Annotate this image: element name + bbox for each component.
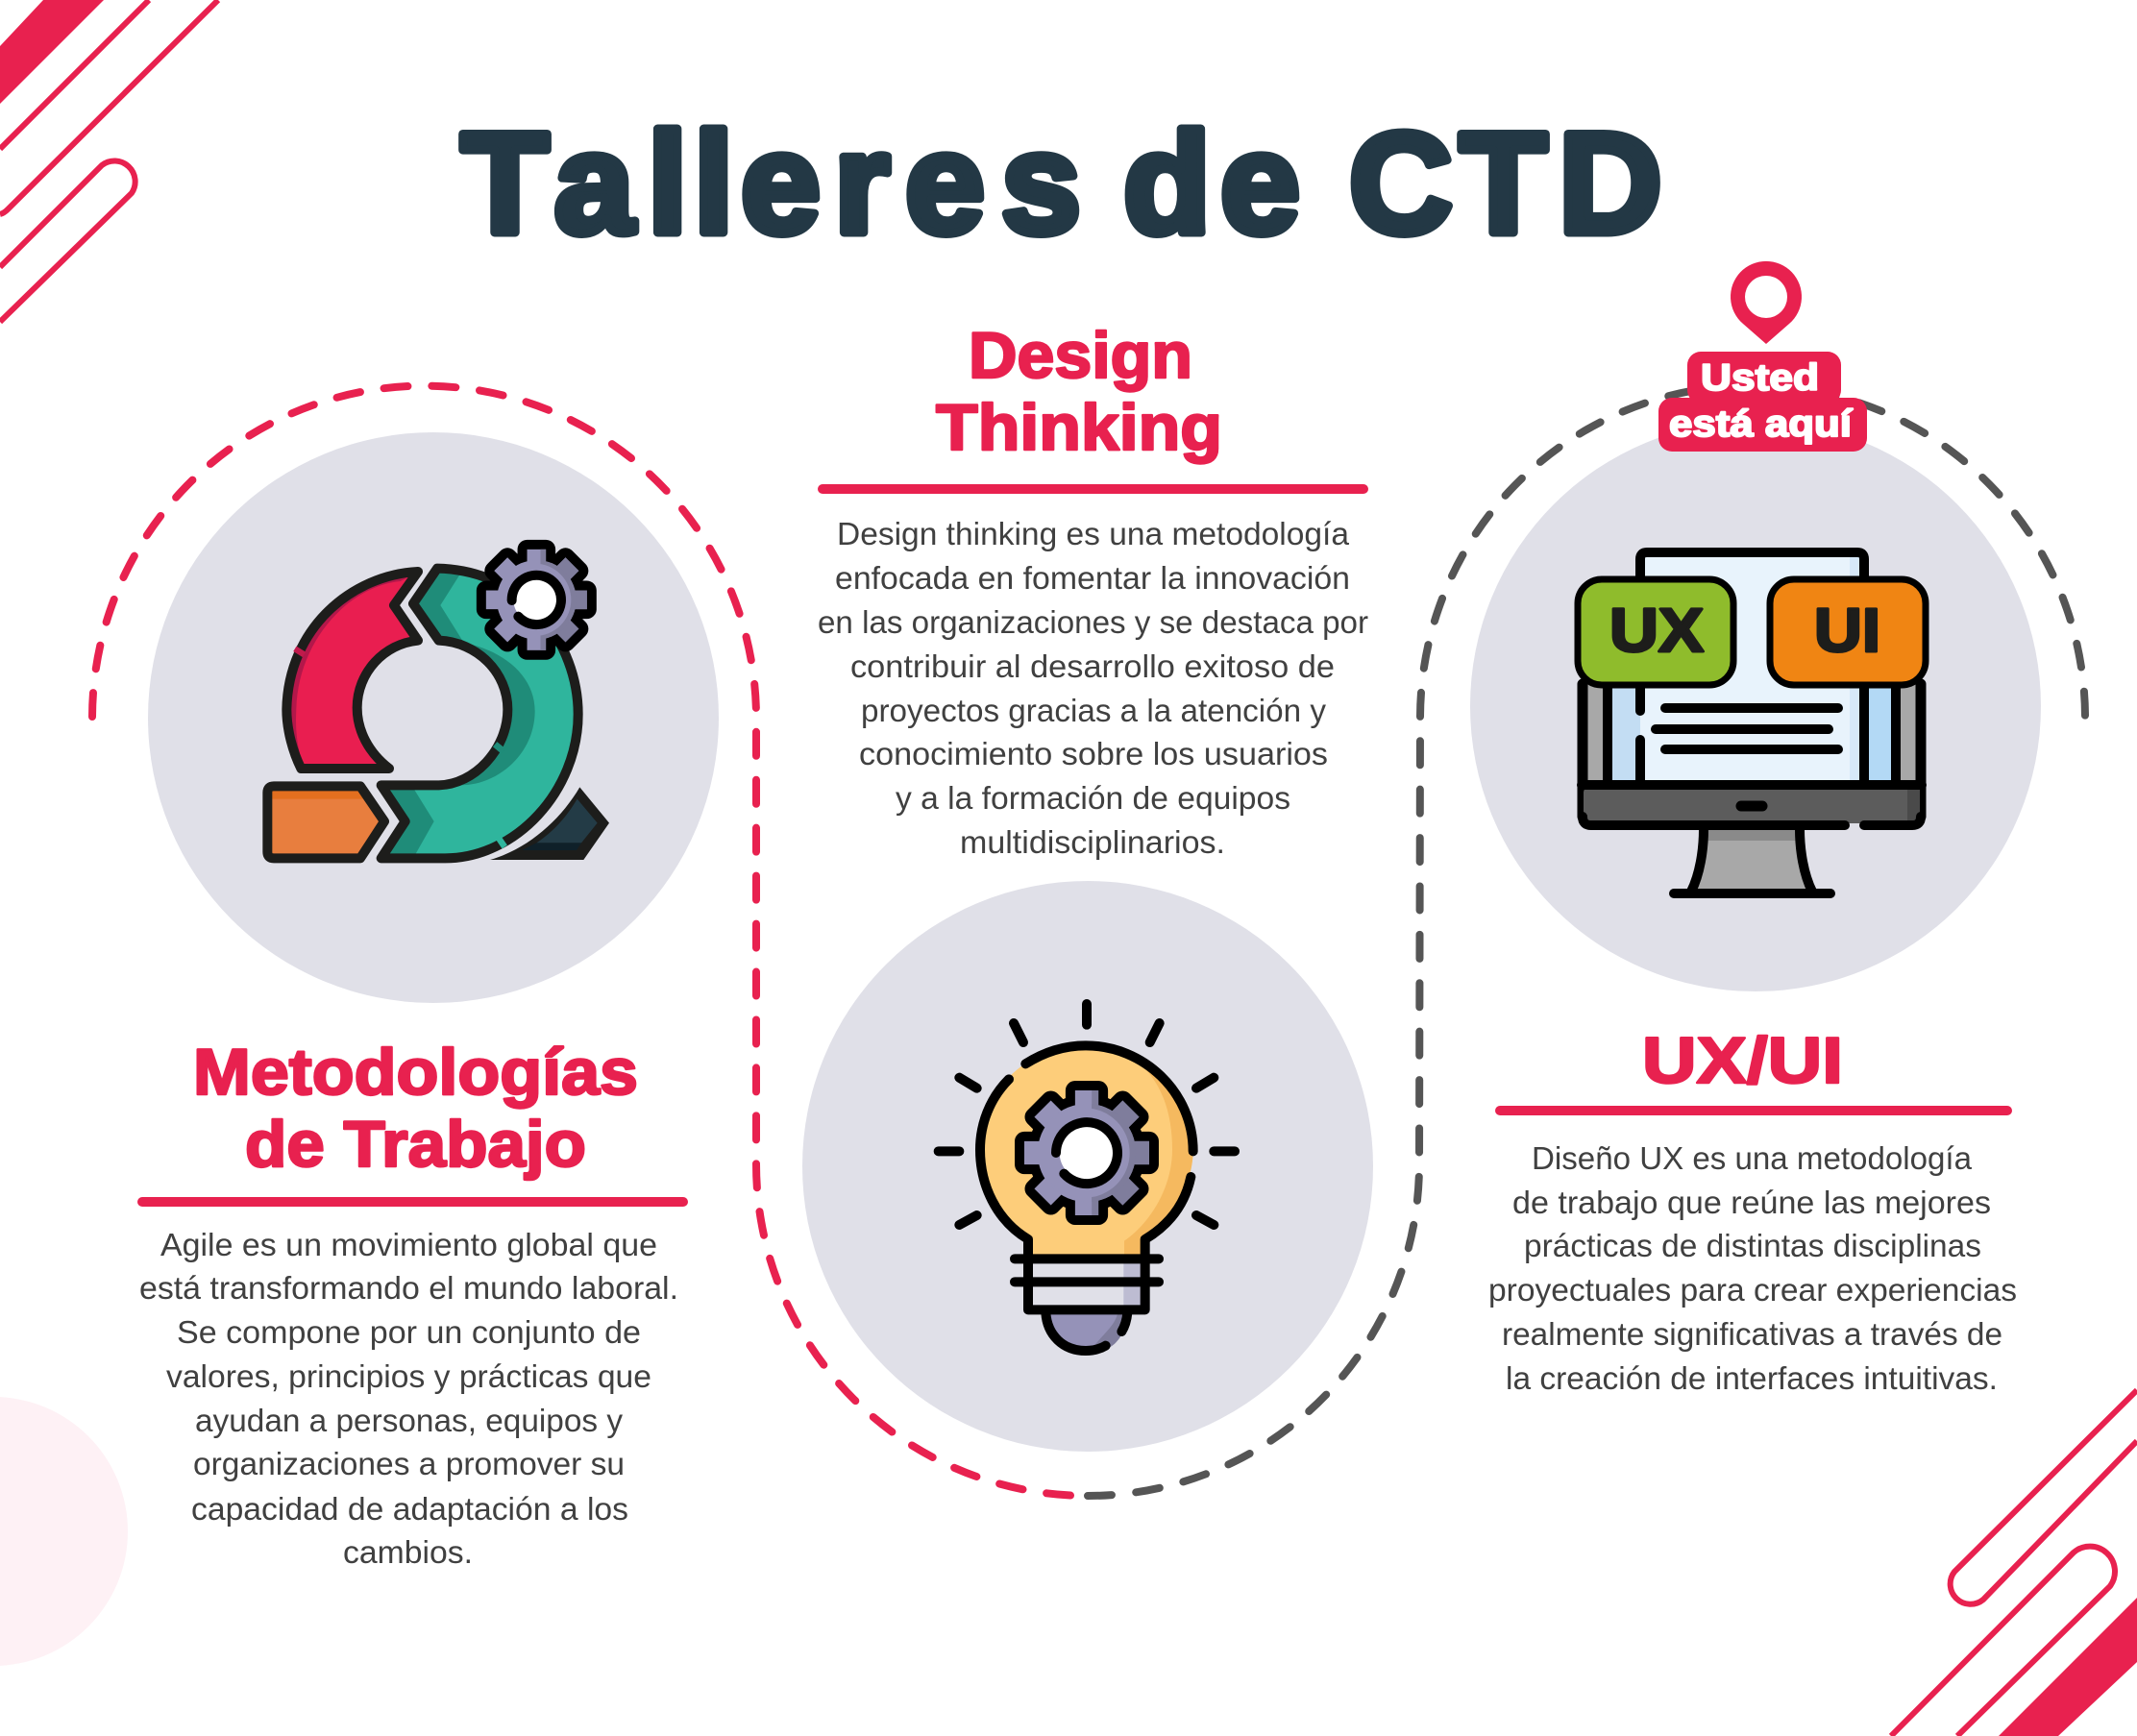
text block: metodologías de trabajo: organizaciones a promover su bbox=[193, 1446, 625, 1481]
text block: design thinking: contribuir al desarrollo exitoso de bbox=[850, 648, 1335, 684]
panel: design thinking bbox=[818, 319, 1368, 860]
you are here label: está aquí bbox=[1669, 403, 1853, 445]
text block: design thinking: multidisciplinarios. bbox=[960, 824, 1225, 860]
location pin bbox=[1731, 261, 1802, 344]
title: de bbox=[1123, 103, 1300, 263]
text block: UX/UI: Diseño UX es una metodología bbox=[1532, 1140, 1973, 1176]
heading: design thinking: Design bbox=[969, 319, 1192, 392]
icon: computer monitor with UX and UI tags bbox=[1578, 552, 1926, 893]
tag: UI: UI bbox=[1814, 596, 1880, 665]
heading: UX/UI: UX/UI bbox=[1642, 1024, 1843, 1097]
text block: design thinking bbox=[818, 516, 1368, 860]
text block: design thinking: en las organizaciones y se destaca por bbox=[818, 604, 1368, 640]
text block: metodologías de trabajo: está transformando el mundo laboral. bbox=[139, 1270, 678, 1306]
text block: design thinking: Design thinking es una metodología bbox=[837, 516, 1350, 551]
heading: metodologías de trabajo bbox=[193, 1036, 638, 1181]
panel: metodologías de trabajo bbox=[137, 1036, 688, 1570]
circle background: UX/UI bbox=[1470, 421, 2041, 991]
heading: design thinking bbox=[936, 319, 1222, 464]
panel: UX/UI bbox=[1488, 1024, 2017, 1396]
circle background: methodologies bbox=[148, 432, 719, 1003]
text block: UX/UI: realmente significativas a través de bbox=[1502, 1316, 2002, 1352]
tag: UX: UX bbox=[1609, 596, 1704, 665]
text block: design thinking: y a la formación de equipos bbox=[896, 780, 1290, 816]
heading: design thinking: Thinking bbox=[936, 391, 1222, 464]
text block: design thinking: enfocada en fomentar la innovación bbox=[835, 560, 1350, 596]
text block: UX/UI: prácticas de distintas disciplinas bbox=[1524, 1228, 1981, 1263]
text block: UX/UI: proyectuales para crear experiencias bbox=[1488, 1272, 2017, 1308]
text block: metodologías de trabajo: Se compone por un conjunto de bbox=[177, 1314, 641, 1350]
text block: metodologías de trabajo: cambios. bbox=[343, 1534, 473, 1570]
tag: UX bbox=[1578, 579, 1733, 685]
text block: metodologías de trabajo: Agile es un movimiento global que bbox=[160, 1227, 657, 1262]
corner decoration: bottom right bbox=[1891, 1390, 2137, 1736]
text block: design thinking: conocimiento sobre los usuarios bbox=[859, 736, 1328, 771]
title: CTD bbox=[1349, 103, 1662, 263]
corner decoration: top left bbox=[0, 0, 218, 322]
title bbox=[461, 103, 1662, 263]
circle background: design thinking bbox=[802, 881, 1373, 1452]
icon: light bulb with gear bbox=[939, 1004, 1235, 1352]
dashed path: grey section bbox=[1088, 385, 2085, 1496]
you are here label bbox=[1658, 352, 1867, 452]
text block: metodologías de trabajo bbox=[139, 1227, 678, 1570]
decorative pale circle: bottom left bbox=[0, 1397, 128, 1666]
icon: agile cycle arrows and gear bbox=[267, 550, 609, 860]
title: Talleres bbox=[461, 103, 1081, 263]
text block: metodologías de trabajo: ayudan a personas, equipos y bbox=[195, 1403, 624, 1438]
tag: UI bbox=[1770, 579, 1926, 685]
heading: metodologías de trabajo: de Trabajo bbox=[245, 1108, 586, 1181]
you are here label: Usted bbox=[1701, 357, 1819, 399]
text block: UX/UI bbox=[1488, 1140, 2017, 1396]
text block: metodologías de trabajo: capacidad de adaptación a los bbox=[191, 1491, 628, 1527]
text block: UX/UI: la creación de interfaces intuitivas. bbox=[1506, 1360, 1998, 1396]
dashed path: red section bbox=[92, 386, 1070, 1495]
text block: design thinking: proyectos gracias a la atención y bbox=[861, 693, 1326, 728]
heading: metodologías de trabajo: Metodologías bbox=[193, 1036, 638, 1109]
text block: UX/UI: de trabajo que reúne las mejores bbox=[1512, 1185, 1991, 1220]
text block: metodologías de trabajo: valores, principios y prácticas que bbox=[166, 1358, 651, 1394]
